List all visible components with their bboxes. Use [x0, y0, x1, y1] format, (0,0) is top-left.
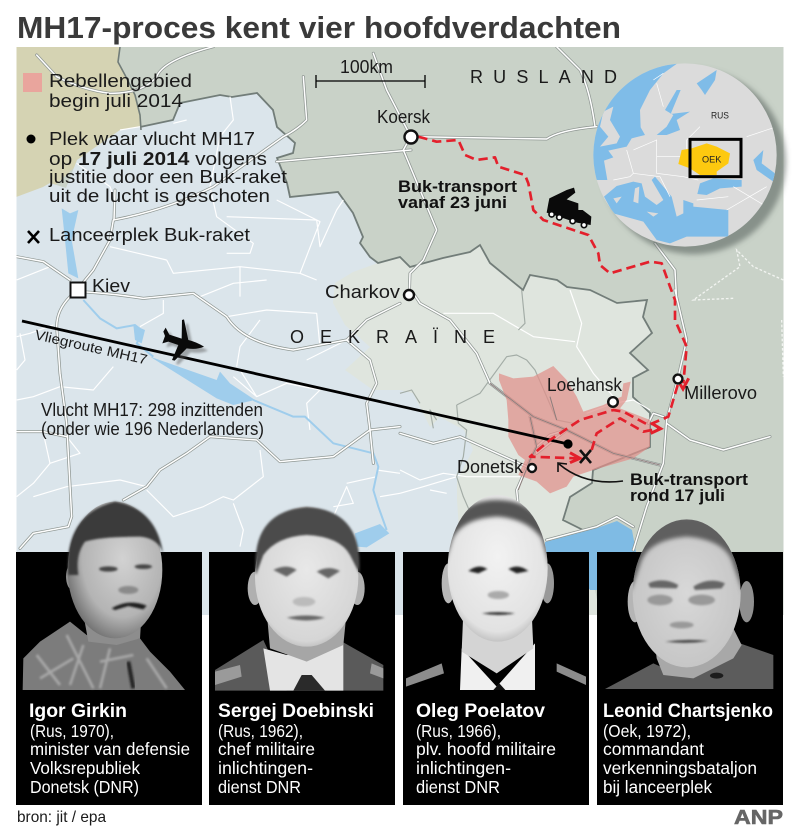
- description: [416, 721, 556, 797]
- legend: launch site: Lanceerplek Buk-raket: [49, 225, 250, 245]
- label: Buk-transport vanaf 23 juni: vanaf 23 juni: [398, 194, 507, 212]
- description: (Rus, 1966),: [416, 721, 501, 741]
- name: Oleg Poelatov: [416, 700, 545, 722]
- flight route line: [22, 321, 568, 444]
- map: minor roads and regional borders: [17, 300, 400, 547]
- description: minister van defensie: [30, 739, 190, 759]
- description: commandant: [603, 739, 704, 759]
- map: minor roads north: [17, 97, 343, 297]
- legend dot: [26, 134, 36, 144]
- description: inlichtingen-: [218, 758, 313, 778]
- label: Vliegroute MH17: Vliegroute MH17: [33, 326, 149, 367]
- city: Charkov: Charkov: [325, 282, 400, 302]
- description: bij lanceerplek: [603, 777, 712, 797]
- description: (Oek, 1972),: [603, 721, 691, 741]
- description: dienst DNR: [416, 777, 500, 797]
- scale bar: 100km: [340, 57, 393, 77]
- launch site marker: [580, 450, 591, 463]
- city: Koersk: Koersk: [377, 107, 431, 127]
- map: Russia background: [16, 47, 784, 615]
- panel background: [597, 552, 783, 805]
- map: highways core: [17, 47, 770, 550]
- name: Leonid Chartsjenko: [603, 700, 773, 722]
- crash site marker: [563, 439, 573, 449]
- globe label: OEK: OEK: [702, 155, 721, 165]
- globe: detail frame: [690, 139, 741, 177]
- legend: crash site: op 17 juli 2014 volgens: [49, 149, 267, 169]
- river: Desna reservoir north of Kiev: [62, 208, 78, 278]
- globe label: RUS: RUS: [711, 111, 729, 121]
- globe: Ukraine highlight: [678, 143, 730, 175]
- legend: rebel territory: [23, 71, 192, 111]
- legend: crash site: justitie door een Buk-raket: [48, 167, 287, 187]
- label: Buk-transport vanaf 23 juni: Buk-transport: [398, 178, 518, 196]
- legend: crash site: [26, 129, 287, 206]
- description: [218, 721, 315, 797]
- map: road lines inside rebel area: [490, 383, 660, 490]
- description: dienst DNR: [218, 777, 301, 797]
- legend swatch: [23, 73, 42, 92]
- description: (Rus, 1962),: [218, 721, 303, 741]
- arrow heads: [570, 423, 661, 463]
- icon: plane: [162, 319, 208, 365]
- label: Buk-transport rond 17 juli: [630, 471, 749, 505]
- legend: rebel territory: Rebellengebied: [49, 71, 192, 91]
- globe: land: [593, 63, 777, 247]
- scale bar: [316, 57, 425, 88]
- name: Sergej Doebinski: [218, 700, 374, 722]
- name: Igor Girkin: [29, 700, 127, 722]
- legend: rebel territory: begin juli 2014: [49, 91, 183, 111]
- map: Belarus area: [16, 47, 141, 197]
- description: Donetsk (DNR): [30, 777, 139, 797]
- legend: crash site: uit de lucht is geschoten: [49, 186, 270, 206]
- label: Buk-transport vanaf 23 juni: [398, 178, 518, 212]
- city: Kiev: [70, 276, 130, 298]
- map: dotted regional border in Russia: [693, 250, 783, 377]
- description: chef militaire: [218, 739, 315, 759]
- panel background: [403, 552, 589, 805]
- globe: country borders: [613, 73, 777, 210]
- source: bron: jit / epa: [17, 809, 106, 826]
- panel: Sergej Doebinski: [209, 507, 395, 805]
- panel: Leonid Chartsjenko: [597, 517, 783, 805]
- city: Donetsk: Donetsk: [457, 457, 524, 477]
- portrait: [605, 517, 773, 689]
- legend: crash site: Plek waar vlucht MH17: [49, 129, 255, 149]
- map: minor roads east: [400, 290, 650, 523]
- arrow: to route around 17 july: [558, 463, 623, 482]
- globe: seas: [587, 60, 775, 243]
- description: [603, 721, 757, 797]
- label: occupants: [41, 400, 264, 439]
- portrait: [23, 502, 185, 690]
- city: Kiev: Kiev: [92, 276, 130, 296]
- map: highways casing: [17, 47, 770, 550]
- description: (Rus, 1970),: [30, 721, 114, 741]
- label: occupants: (onder wie 196 Nederlanders): [41, 419, 264, 439]
- description: verkenningsbataljon: [603, 758, 757, 778]
- city: Millerovo: Millerovo: [684, 383, 757, 403]
- panel: Oleg Poelatov: [403, 495, 589, 805]
- portrait: [215, 507, 383, 691]
- legend cross: [28, 231, 39, 243]
- arrow head at Millerovo: [677, 378, 689, 389]
- portrait: [406, 495, 586, 690]
- map: Ukraine west: [16, 93, 652, 615]
- Buk route from Koersk: [418, 137, 689, 389]
- label: Oekraine: OEKRAÏNE: [290, 327, 495, 347]
- globe: drop shadow: [601, 69, 786, 254]
- panel: Igor Girkin: [16, 502, 202, 805]
- Buk route around 17 july: [530, 385, 678, 463]
- description: plv. hoofd militaire: [416, 739, 556, 759]
- city: Loehansk: Loehansk: [547, 375, 623, 395]
- city: Koersk: [377, 107, 431, 144]
- map: Ukraine east: [333, 245, 652, 615]
- label: occupants: Vlucht MH17: 298 inzittenden: [41, 400, 263, 420]
- description: [30, 721, 190, 797]
- city: Millerovo: [674, 375, 757, 403]
- panel background: [209, 552, 395, 805]
- map: Belarus border: [118, 47, 141, 130]
- label: Rusland: RUSLAND: [470, 67, 617, 87]
- description: inlichtingen-: [416, 758, 511, 778]
- sea of Azov: [545, 521, 636, 590]
- label: Buk-transport rond 17 juli: rond 17 juli: [630, 487, 725, 505]
- map: [16, 47, 784, 615]
- map: rebel territory: [499, 366, 650, 493]
- globe: [587, 60, 786, 254]
- city: Loehansk: [547, 375, 623, 407]
- ANP logo: ANP: [734, 807, 783, 829]
- river: Dnjepr: [83, 300, 389, 547]
- label: Buk-transport rond 17 juli: Buk-transport: [630, 471, 749, 489]
- map: Russia border: [140, 93, 652, 530]
- icon: Buk launcher: [547, 188, 591, 228]
- panel background: [16, 552, 202, 805]
- title: MH17-proces kent vier hoofdverdachten: [17, 10, 621, 45]
- description: Volksrepubliek: [30, 758, 140, 778]
